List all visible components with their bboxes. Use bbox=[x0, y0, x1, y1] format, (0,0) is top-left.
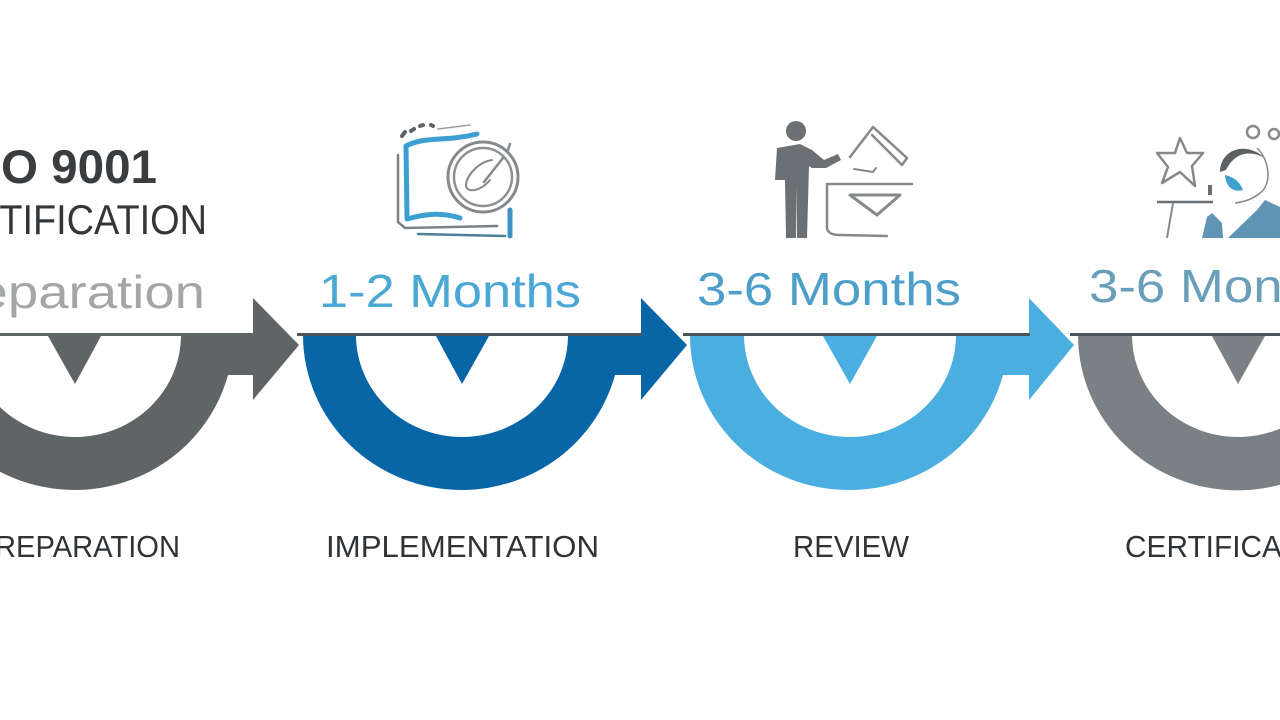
duration: 1-2 Months: 1-2 Months bbox=[319, 265, 581, 317]
icon: book and stopwatch bbox=[398, 125, 518, 236]
ring arrow light blue bbox=[690, 298, 1074, 490]
header line bbox=[297, 333, 642, 336]
header line bbox=[0, 333, 254, 336]
header line bbox=[1070, 333, 1280, 336]
label: REPARATION bbox=[0, 529, 180, 564]
pointer triangle bbox=[823, 336, 877, 384]
stage 2: implementation bbox=[297, 125, 687, 564]
header line bbox=[683, 333, 1030, 336]
pointer triangle bbox=[436, 336, 489, 384]
stage 3: review bbox=[683, 121, 1074, 564]
icon: person with documents bbox=[775, 121, 912, 238]
icon: star, desk and person bbox=[1157, 126, 1280, 238]
stage 4: certification bbox=[1070, 126, 1280, 564]
duration: 3-6 Months: 3-6 Months bbox=[697, 263, 961, 315]
ring arrow dark blue bbox=[303, 298, 687, 490]
stage 1: preparation bbox=[0, 266, 299, 564]
pointer triangle bbox=[1212, 336, 1265, 384]
title: ISO 9001 Certification bbox=[0, 140, 207, 243]
ring arrow gray bbox=[0, 298, 299, 490]
label: REVIEW bbox=[793, 529, 910, 564]
ring gray bbox=[1078, 335, 1280, 490]
pointer triangle bbox=[48, 336, 101, 384]
label: IMPLEMENTATION bbox=[326, 529, 599, 564]
